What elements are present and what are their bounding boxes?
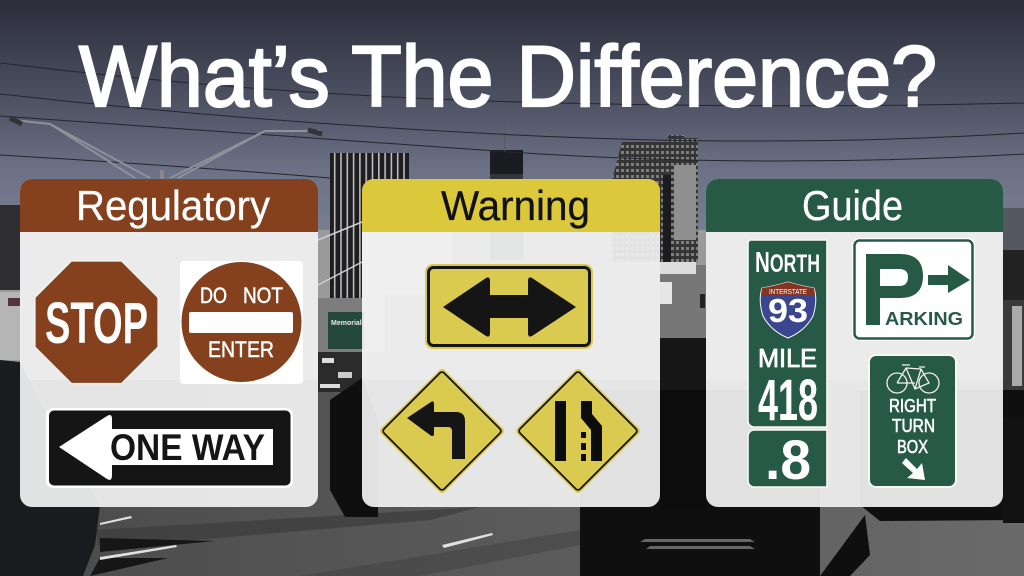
panel: guide	[706, 179, 1003, 507]
sign: one way	[46, 408, 293, 488]
panel: regulatory	[20, 179, 318, 507]
sign: double arrow	[425, 264, 593, 349]
sign: right turn box: BOX	[897, 437, 928, 457]
sign: do not enter	[180, 261, 303, 384]
sign: left turn	[378, 367, 506, 495]
sign: right turn box: TURN	[892, 416, 935, 436]
icon: bicycle	[887, 365, 939, 393]
sign: parking: ARKING	[885, 309, 963, 329]
sign: right turn box	[869, 355, 956, 487]
icon: interstate 93 shield: INTERSTATE	[769, 289, 807, 296]
panel header: regulatory: Regulatory	[76, 182, 270, 229]
skyline buildings	[0, 108, 1024, 420]
icon: interstate 93 shield	[760, 282, 816, 338]
highway sign text in photo: Memorial	[331, 320, 362, 327]
sign: do not enter: DO	[200, 283, 227, 308]
sign: interstate mile marker: NORTH	[755, 247, 820, 279]
dark trees and traffic	[318, 338, 706, 398]
road shadows and lane markings	[90, 507, 580, 576]
panel: warning	[362, 179, 660, 507]
panel header: warning: Warning	[441, 182, 590, 229]
sign: interstate mile marker: 418	[758, 368, 818, 433]
wires	[0, 63, 1024, 178]
icon: interstate 93 shield: 93	[768, 292, 808, 329]
panel header: guide: Guide	[802, 182, 903, 229]
icon: diagonal arrow	[902, 458, 925, 480]
sign: decimal marker: .8	[765, 428, 811, 491]
panel header: regulatory	[20, 179, 318, 232]
sign: parking	[852, 238, 975, 341]
sign: right turn box: RIGHT	[889, 396, 936, 416]
sign: do not enter: NOT	[243, 283, 283, 308]
street light	[10, 118, 322, 240]
cars	[0, 360, 1024, 576]
sign: lane ends	[514, 367, 642, 495]
panel header: warning	[362, 179, 660, 232]
title: What’s The Difference?	[79, 29, 937, 125]
sign: do not enter: ENTER	[208, 337, 274, 362]
sign: interstate mile marker: MILE	[758, 343, 817, 373]
sign: interstate mile marker	[748, 240, 827, 433]
sign: decimal marker	[748, 428, 827, 491]
panel header: guide	[706, 179, 1003, 232]
sign: one way: ONE WAY	[110, 427, 265, 468]
sign: stop	[35, 261, 158, 384]
sign: stop: STOP	[45, 291, 148, 356]
